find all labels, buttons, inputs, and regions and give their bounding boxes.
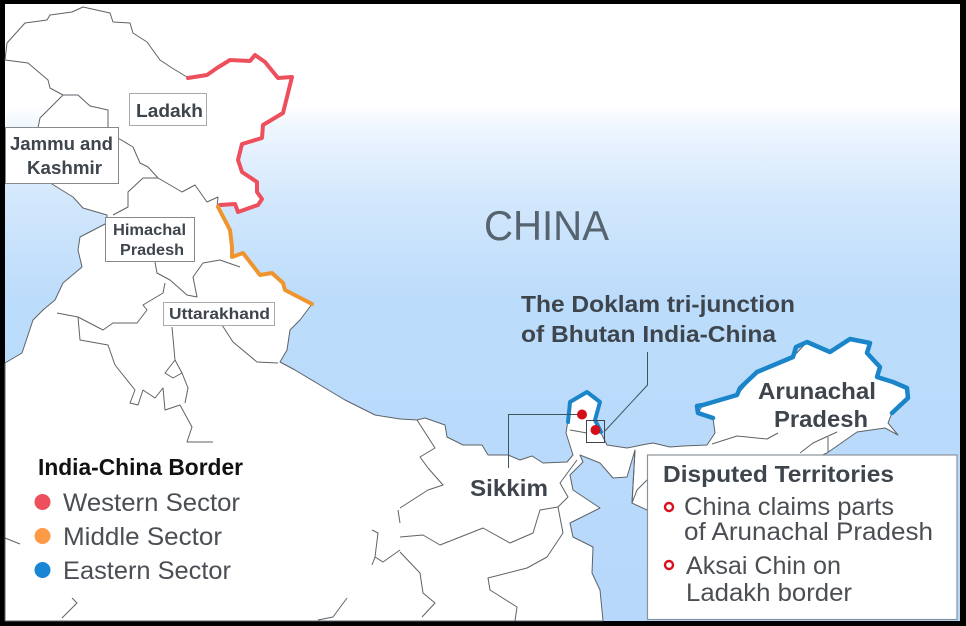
bullet: Aksai Chin bbox=[665, 552, 852, 607]
legend: India-China Border bbox=[34, 454, 243, 585]
Doklam inset box bbox=[586, 420, 604, 442]
label: Jammu and Kashmir: Jammu and bbox=[10, 133, 113, 154]
legend item: western sector: Western Sector bbox=[63, 489, 240, 517]
border: western sector bbox=[188, 55, 292, 212]
label: Ladakh: Ladakh bbox=[136, 100, 203, 121]
Doklam leader line bbox=[604, 352, 648, 432]
marker: Sikkim bbox=[577, 410, 587, 420]
label: Sikkim: Sikkim bbox=[470, 475, 548, 501]
bullet: Arunachal claim: of Arunachal Pradesh bbox=[684, 518, 933, 546]
label: Uttarakhand bbox=[164, 302, 274, 326]
label: China: CHINA bbox=[484, 202, 609, 249]
border: middle sector bbox=[218, 207, 312, 304]
label: Doklam tri-junction: The Doklam tri-junction bbox=[521, 291, 795, 317]
panel: disputed territories bbox=[648, 455, 957, 620]
bullet: Arunachal claim bbox=[665, 493, 933, 546]
label: Jammu and Kashmir bbox=[6, 128, 118, 184]
label: Himachal Pradesh bbox=[106, 218, 194, 262]
legend title: India-China Border bbox=[38, 454, 243, 480]
border: eastern sector, Sikkim bbox=[568, 392, 601, 432]
label: Doklam tri-junction: of Bhutan India-China bbox=[521, 321, 777, 347]
label: Arunachal Pradesh: Arunachal bbox=[758, 378, 876, 404]
label: Doklam tri-junction bbox=[521, 291, 795, 347]
label: Arunachal Pradesh bbox=[758, 378, 876, 432]
internal state borders bbox=[5, 95, 837, 621]
Sikkim leader line bbox=[508, 414, 582, 468]
bullet: Aksai Chin: Aksai Chin on bbox=[686, 552, 841, 580]
legend item: eastern sector: Eastern Sector bbox=[63, 557, 231, 585]
label: Himachal Pradesh: Pradesh bbox=[120, 242, 184, 259]
label: Himachal Pradesh: Himachal bbox=[113, 222, 186, 239]
border: eastern sector, Arunachal bbox=[697, 339, 908, 418]
bullet: Aksai Chin: Ladakh border bbox=[686, 579, 852, 607]
marker: Doklam bbox=[590, 425, 600, 435]
bullet: Arunachal claim: China claims parts bbox=[684, 493, 894, 521]
label: Jammu and Kashmir: Kashmir bbox=[27, 157, 102, 178]
label: Arunachal Pradesh: Pradesh bbox=[774, 406, 868, 432]
legend item: middle sector: Middle Sector bbox=[63, 523, 222, 551]
panel heading: Disputed Territories bbox=[663, 461, 894, 487]
label: Ladakh bbox=[130, 94, 206, 126]
label: Uttarakhand: Uttarakhand bbox=[169, 306, 270, 323]
